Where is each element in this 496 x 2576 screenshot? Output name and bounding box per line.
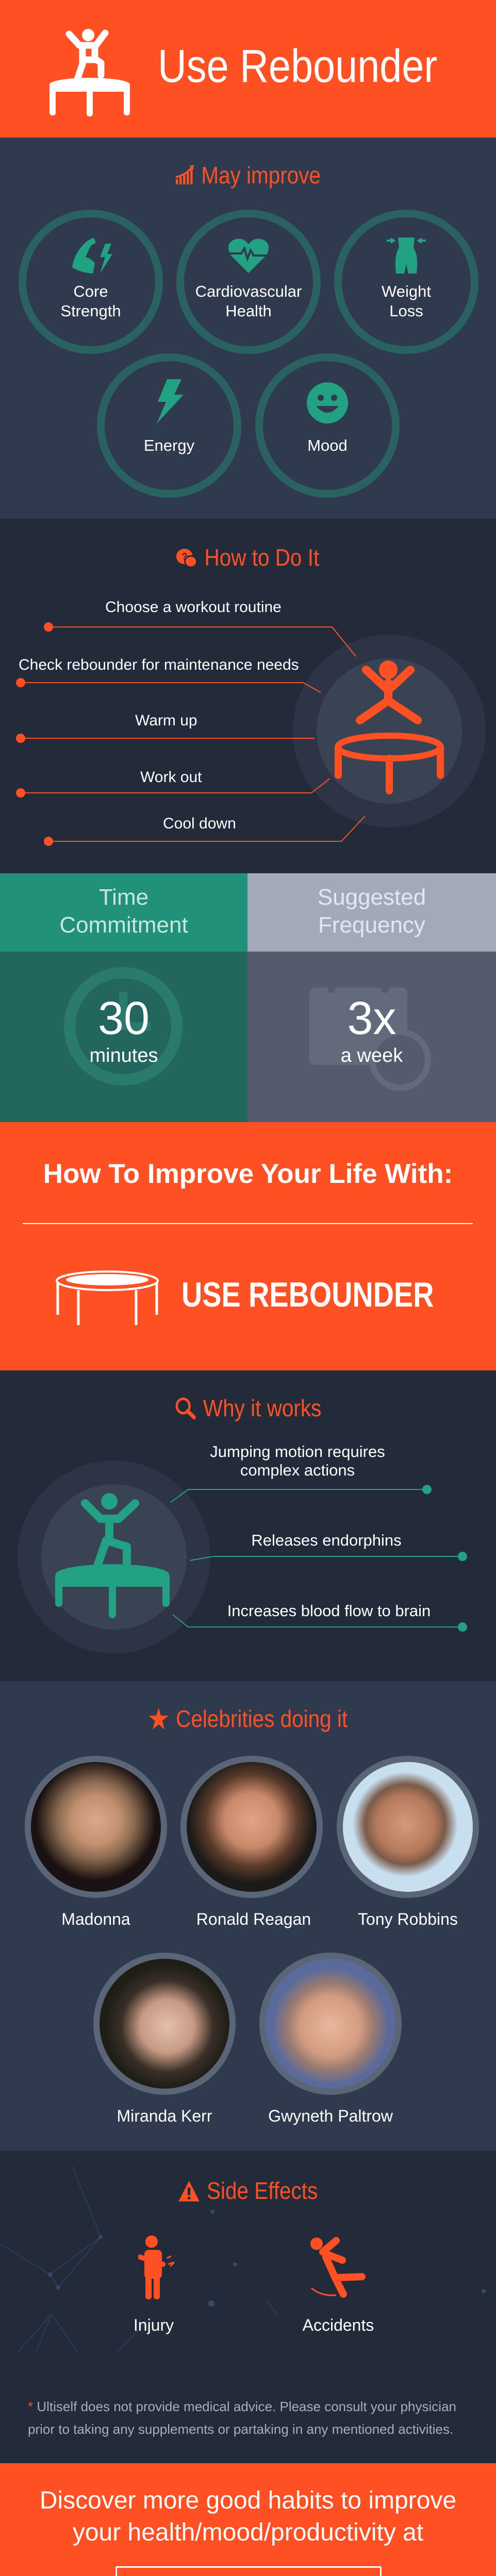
panel: time commitment: Time	[99, 885, 148, 910]
connector lines	[16, 622, 366, 846]
step: warm up: Warm up	[135, 712, 197, 729]
stat: 3x a week: 3x	[347, 993, 396, 1044]
illustration: teal jumper	[18, 1461, 210, 1653]
label: injury: Injury	[134, 2316, 174, 2334]
disclaimer: * Ultiself does not provide medical advice. Please consult your physician	[28, 2399, 456, 2414]
circle: mood	[255, 353, 400, 498]
panel: why it works	[0, 1370, 496, 1681]
banner: how to improve your life	[0, 1122, 496, 1370]
heading: why it works: Why it works	[203, 1395, 321, 1421]
heading: may improve: May improve	[202, 162, 321, 189]
disclaimer: prior to taking any supplements or partaking in any mentioned activities.	[28, 2421, 453, 2437]
reason: jumping motion: Jumping motion requires	[210, 1443, 385, 1461]
circle: cardiovascular health	[176, 210, 321, 354]
illustration: rebounder circle with orange jumper	[293, 635, 486, 827]
panel: time commitment: Commitment	[59, 912, 188, 938]
step: choose workout routine: Choose a workout routine	[105, 599, 282, 616]
panel: suggested frequency: Frequency	[318, 912, 425, 938]
icon: person on rebounder	[49, 29, 130, 116]
stat: 30 minutes: 30	[98, 993, 150, 1044]
reason: blood flow: Increases blood flow to brain	[227, 1602, 431, 1620]
heading: How To Improve Your Life With:	[43, 1159, 453, 1189]
panel: how to do it	[0, 519, 496, 873]
heading: side effects: Side Effects	[207, 2177, 318, 2204]
circle: energy	[97, 353, 241, 498]
heading: how to do it: ?	[182, 551, 188, 562]
icon: faded calendar	[309, 988, 431, 1091]
heading: celebrities: Celebrities doing it	[176, 1705, 348, 1732]
name: madonna: Madonna	[61, 1910, 130, 1928]
circle: core strength: Strength	[60, 302, 121, 320]
photo: ronald reagan	[180, 1756, 323, 1898]
link box	[115, 2566, 382, 2576]
name: tony robbins: Tony Robbins	[358, 1910, 458, 1928]
name: miranda kerr: Miranda Kerr	[117, 2107, 212, 2125]
circle: cardiovascular health: Cardiovascular	[195, 282, 302, 300]
connector lines	[170, 1485, 467, 1632]
step: work out: Work out	[140, 769, 202, 786]
photo: madonna	[25, 1756, 167, 1898]
panel: may improve	[0, 138, 496, 519]
circle: core strength	[19, 210, 163, 354]
photo: gwyneth paltrow	[259, 1953, 402, 2095]
stat: 30 minutes	[89, 993, 158, 1066]
reason: jumping motion: complex actions	[240, 1461, 355, 1479]
circle: cardiovascular health: Health	[225, 302, 272, 320]
banner: call to action	[0, 2463, 496, 2576]
panel: suggested frequency	[247, 873, 496, 1122]
panel: suggested frequency: Suggested	[318, 885, 426, 910]
icon: faded clock	[64, 967, 183, 1086]
circle: weight loss: Weight	[382, 282, 431, 300]
photo: miranda kerr	[93, 1953, 236, 2095]
title: use rebounder: USE REBOUNDER	[181, 1275, 434, 1314]
circle: energy: Energy	[144, 436, 194, 454]
circle: weight loss	[334, 210, 478, 354]
icon: accidents	[310, 2237, 366, 2298]
reason: endorphins: Releases endorphins	[251, 1531, 402, 1549]
name: ronald reagan: Ronald Reagan	[196, 1910, 311, 1928]
step: cool down: Cool down	[163, 815, 236, 832]
icon: injury	[138, 2235, 175, 2299]
circle: mood: Mood	[307, 436, 348, 454]
circle: core strength: Core	[73, 282, 108, 300]
panel: time commitment	[0, 873, 247, 1122]
header banner	[0, 0, 496, 138]
heading: how to do it: How to Do It	[205, 544, 320, 571]
stat: 3x a week: a week	[341, 1045, 403, 1066]
label: accidents: Accidents	[303, 2316, 374, 2334]
disclaimer	[28, 2399, 456, 2437]
stat: 3x a week	[341, 993, 403, 1066]
reason: jumping motion	[210, 1443, 385, 1479]
circle: weight loss: Loss	[389, 302, 423, 320]
step: check rebounder: Check rebounder for maintenance needs	[19, 656, 299, 673]
panel: side effects	[0, 2151, 496, 2463]
icon: rebounder outline	[56, 1270, 159, 1325]
name: gwyneth paltrow: Gwyneth Paltrow	[268, 2107, 393, 2125]
cta text	[40, 2487, 456, 2546]
title: Use Rebounder	[158, 41, 437, 92]
cta text: Discover more good habits to improve	[40, 2487, 456, 2514]
panel: celebrities	[0, 1681, 496, 2151]
stat: 30 minutes: minutes	[89, 1045, 158, 1066]
photo: tony robbins	[337, 1756, 479, 1898]
cta text: your health/mood/productivity at	[73, 2519, 423, 2546]
